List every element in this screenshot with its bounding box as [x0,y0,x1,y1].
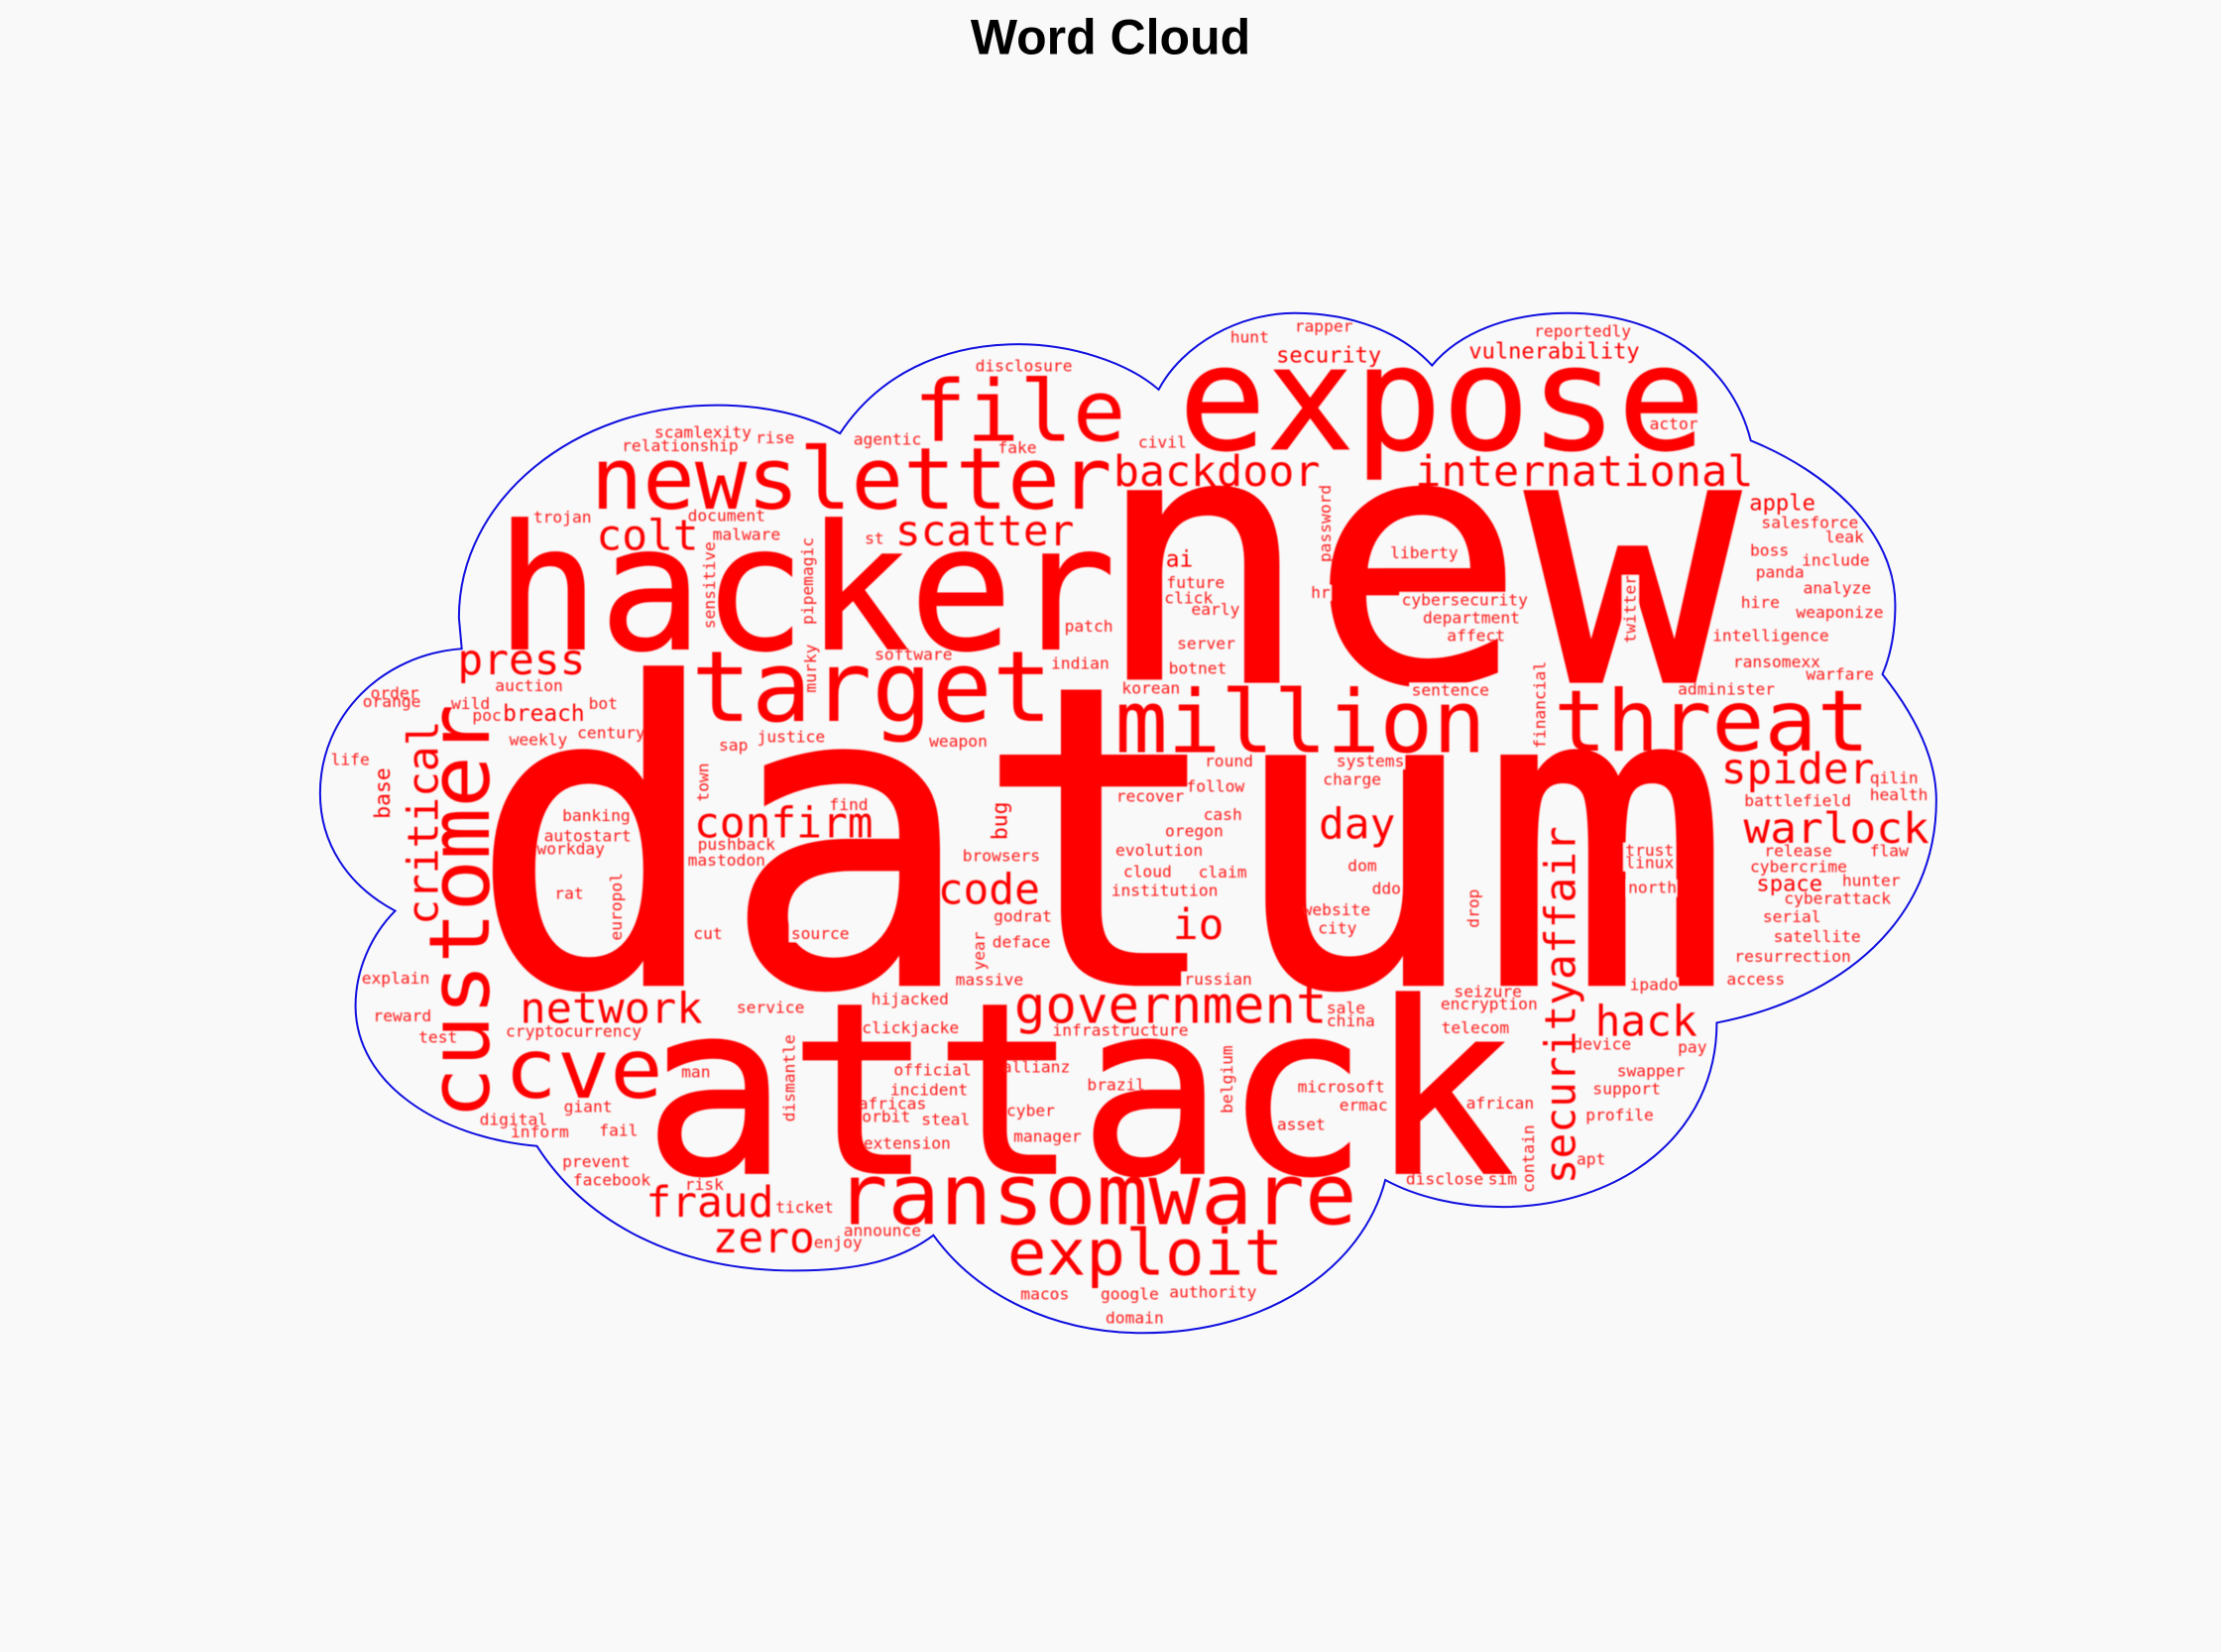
word: international: international [1415,447,1754,497]
group: small horizontal words: brazil [1087,1075,1145,1094]
group: small horizontal words: life [331,750,370,768]
group: small horizontal words: find [829,795,869,814]
vertical word: pipemagic: pipemagic [798,537,817,625]
group: small horizontal words: cash [1204,805,1242,824]
group: small horizontal words: auction [495,676,563,695]
group: small horizontal words: apt [1577,1149,1605,1168]
word: day: day [1319,800,1395,850]
group: small horizontal words: institution [1111,882,1218,900]
word: space: space [1756,872,1822,897]
group: small horizontal words: incident [890,1080,968,1099]
word: io: io [1173,900,1224,950]
group: small horizontal words: pushback [698,835,775,854]
group: small horizontal words: actor [1650,414,1698,433]
group: small horizontal words: release [1764,842,1832,861]
group: small horizontal words: africas [859,1095,926,1114]
group: small horizontal words: orange [363,692,420,711]
vertical word: contain: contain [1519,1124,1538,1193]
group: small horizontal words: cryptocurrency [506,1022,642,1041]
word: warlock: warlock [1744,804,1929,854]
vertical word: town: town [693,763,712,802]
word: vulnerability: vulnerability [1468,339,1640,364]
group: small horizontal words: weekly [510,730,568,749]
group: small horizontal words: encryption [1441,995,1538,1013]
group: small horizontal words: website [1303,900,1370,919]
group: small horizontal words: manager [1013,1126,1082,1145]
group: small horizontal words: macos [1020,1285,1069,1304]
word: new: new [1095,359,1743,764]
group: small horizontal words: round [1205,752,1253,770]
group: small horizontal words: inform [511,1122,569,1141]
group: small vertical words [607,485,1639,1193]
group: small horizontal words: botnet [1169,658,1227,677]
group: small horizontal words: seizure [1454,983,1522,1002]
group: small horizontal words: recover [1116,787,1184,806]
group: small horizontal words: follow [1186,777,1244,796]
vertical word: financial: financial [1531,661,1550,749]
title: Word Cloud [971,9,1250,64]
word: scatter: scatter [895,507,1074,556]
group: small horizontal words: china [1327,1011,1375,1030]
group: small horizontal words: asset [1277,1115,1326,1133]
group: small horizontal words: patch [1065,617,1113,636]
group: small horizontal words: cybersecurity [1402,591,1528,610]
group: small horizontal words: battlefield [1744,791,1851,810]
group: small horizontal words: announce [844,1221,921,1239]
vertical word: securityaffair: securityaffair [1537,826,1586,1184]
group: small horizontal words: include [1802,551,1870,570]
word: breach: breach [503,701,585,727]
group: small horizontal words: scamlexity [654,422,752,441]
group: small horizontal words: relationship [622,436,739,455]
word: datum: datum [469,598,1732,1084]
group: small horizontal words: digital [480,1110,547,1128]
vertical word: year: year [970,931,989,971]
group: small horizontal words: swapper [1617,1062,1685,1081]
group: small horizontal words: explain [362,969,429,988]
group: small horizontal words: deface [993,933,1050,952]
group: small horizontal words: qilin [1870,768,1919,787]
group: small horizontal words: steal [921,1110,970,1128]
group: small horizontal words: source [791,924,850,943]
group: small horizontal words: st [865,530,884,548]
word: hacker: hacker [496,489,1116,690]
group: small horizontal words: salesforce [1761,513,1858,531]
group: small horizontal words: official [893,1060,972,1079]
group: small horizontal words: agentic [854,430,921,449]
group: small horizontal words: administer [1678,680,1775,699]
group: medium words [457,447,1929,1263]
group: small horizontal words: liberty [1390,543,1459,562]
group: small horizontal words: clickjacke [862,1018,959,1037]
group: small horizontal words: justice [758,728,825,747]
vertical word: password: password [1316,485,1335,562]
group: small horizontal words: evolution [1115,841,1203,860]
word: confirm: confirm [694,798,874,848]
group: small horizontal words: order [371,683,419,702]
group: small horizontal words: warfare [1806,665,1874,684]
group: small horizontal words: facebook [573,1171,650,1190]
word: attack: attack [643,952,1514,1230]
group: small horizontal words: workday [536,839,605,858]
group: small horizontal words: hire [1741,593,1780,612]
group: small horizontal words: hunt [1230,328,1269,347]
word: code: code [938,865,1040,914]
word: backdoor: backdoor [1113,447,1320,497]
group: small horizontal words: profile [1585,1106,1654,1124]
group: small horizontal words: dom [1347,857,1377,876]
group: small horizontal words: sentence [1412,680,1489,699]
word: security: security [1276,344,1381,369]
group: small horizontal words: future [1166,573,1225,592]
group: small horizontal words: panda [1756,562,1805,581]
vertical word: sensitive: sensitive [700,541,719,629]
group: small horizontal words: domain [1106,1308,1164,1327]
word: target: target [691,632,1052,745]
group: small horizontal words: korean [1121,678,1180,697]
group: small horizontal words: intelligence [1712,627,1829,646]
word: newsletter: newsletter [591,430,1111,530]
group: small horizontal words: leak [1825,528,1864,546]
group: small horizontal words: browsers [963,847,1040,866]
word: apple: apple [1749,490,1815,516]
group: small horizontal words: enjoy [814,1234,863,1252]
group: small horizontal words: microsoft [1298,1077,1385,1096]
group: small horizontal words: ransomexx [1733,652,1820,671]
group: small horizontal words: indian [1051,653,1110,672]
group: small horizontal words: hr [1311,583,1331,602]
group: small horizontal words: mastodon [688,851,765,870]
group: small horizontal words: cyber [1006,1102,1055,1121]
vertical word: belgium: belgium [1218,1045,1236,1114]
group: small horizontal words: trojan [533,508,592,527]
word: file: file [913,362,1125,461]
group: small horizontal words: weapon [929,732,988,751]
group: small horizontal words: orbit [862,1107,910,1125]
word: exploit: exploit [1007,1217,1283,1291]
group: small horizontal words: click [1164,589,1213,608]
group: small horizontal words: claim [1199,863,1247,882]
group: small horizontal words: boss [1750,541,1789,560]
group: small horizontal words: authority [1169,1283,1257,1302]
group: small horizontal words: fail [599,1121,638,1140]
group: small horizontal words: weaponize [1796,603,1884,622]
vertical word: drop: drop [1463,889,1482,928]
group: small horizontal words: autostart [544,827,632,846]
vertical word: europol: europol [607,873,626,941]
group: small horizontal words: rise [756,428,794,447]
group: small horizontal words: disclosure [976,356,1073,375]
group: small horizontal words: ticket [775,1198,834,1217]
group: small horizontal words: service [737,998,804,1016]
group: small horizontal words: rat [554,884,584,902]
group: small horizontal words: city [1318,918,1357,937]
group: small horizontal words: extension [864,1134,951,1153]
group: small horizontal words: north [1628,879,1677,897]
group: small horizontal words: ipado [1630,976,1679,995]
group: small horizontal words: godrat [994,906,1052,925]
group: small horizontal words: telecom [1442,1018,1509,1037]
group: small horizontal words: reportedly [1534,321,1631,340]
word: zero: zero [713,1214,815,1263]
group: small horizontal words: satellite [1774,927,1861,946]
group: small horizontal words: serial [1763,907,1821,926]
word: ransomware: ransomware [836,1145,1357,1244]
group: small horizontal words: ddo [1372,879,1401,897]
word: fraud: fraud [645,1178,773,1228]
group: small horizontal words: access [1726,970,1785,989]
group: small horizontal words: massive [956,971,1023,990]
group: small horizontal words: charge [1323,769,1381,788]
group: small horizontal words: support [1592,1080,1661,1099]
group: small horizontal words: hijacked [872,990,949,1008]
word: spider: spider [1721,745,1874,794]
group: small horizontal words: pay [1678,1037,1707,1056]
group: small horizontal words: cyberattack [1784,888,1891,907]
group: small horizontal words: infrastructure [1052,1020,1189,1039]
group: small horizontal words: rapper [1295,316,1353,335]
vertical word: twitter: twitter [1620,575,1639,644]
group: small horizontal words: cybercrime [1750,857,1847,876]
group: small horizontal words: giant [564,1097,613,1116]
group: small horizontal words: century [577,723,645,742]
group: small horizontal words: sale [1327,999,1365,1017]
group: small horizontal words: flaw [1870,842,1909,861]
vertical word: base: base [371,767,396,819]
group: small horizontal words: document [688,507,765,526]
group: small horizontal words: malware [713,525,780,543]
word: government: government [1014,976,1328,1035]
group: small horizontal words: server [1177,634,1235,652]
group: small horizontal words: fake [997,438,1037,457]
word: ai: ai [1166,546,1193,572]
group: small horizontal words: cut [693,924,723,943]
group: small horizontal words: resurrection [1734,947,1851,966]
group: small horizontal words: google [1101,1285,1159,1304]
group: small horizontal words: test [418,1027,457,1046]
group: small horizontal words: ermac [1340,1096,1388,1115]
group: small horizontal words: cloud [1123,862,1172,881]
group: small horizontal words: allianz [1002,1057,1070,1076]
group: small horizontal words: man [681,1062,711,1081]
group: small horizontal words: health [1870,785,1928,804]
word: network: network [520,984,703,1033]
group: small horizontal words: software [875,646,952,664]
group: small horizontal words: department [1423,609,1520,628]
word: press: press [457,636,585,685]
group: small horizontal words: trust [1625,841,1674,860]
group: small horizontal words: analyze [1804,579,1871,598]
group: small horizontal words: device [1573,1035,1631,1054]
group: small horizontal words: wild [451,694,490,713]
vertical word: dismantle: dismantle [779,1034,798,1121]
large and medium words [371,316,1929,1291]
word: colt: colt [596,511,699,560]
word: million: million [1114,672,1486,773]
group: small horizontal words: risk [685,1175,724,1194]
group: small horizontal words: disclose [1406,1169,1483,1188]
group: small horizontal words: reward [373,1006,431,1025]
group: small horizontal words: civil [1138,432,1187,451]
group: small horizontal words: sap [719,736,748,755]
cloud outline [320,313,1936,1333]
group: small horizontal words: sim [1488,1169,1517,1188]
vertical word: customer: customer [411,704,509,1120]
group: small horizontal words: russian [1184,970,1252,989]
group: small horizontal words: banking [562,806,631,825]
group: small horizontal words: oregon [1165,822,1224,841]
group: small horizontal words: hunter [1842,872,1901,890]
word: threat: threat [1554,672,1870,771]
group: small horizontal words: poc [472,706,502,725]
word: hack: hack [1595,997,1697,1046]
group: small horizontal words: prevent [562,1152,631,1171]
vertical word: critical: critical [399,720,448,925]
vertical word: murky: murky [801,644,820,693]
group: small horizontal words: early [1191,600,1240,619]
group: small horizontal words: systems [1337,752,1404,770]
group: small horizontal words [331,316,1928,1327]
word: expose: expose [1179,316,1705,484]
group: small horizontal words: african [1466,1094,1534,1113]
group: small horizontal words: bot [589,694,618,713]
word: cve: cve [505,1021,663,1118]
group: small horizontal words: affect [1447,627,1505,646]
vertical word: bug: bug [989,801,1013,840]
small words [331,316,1928,1327]
group: small horizontal words: linux [1625,854,1674,873]
